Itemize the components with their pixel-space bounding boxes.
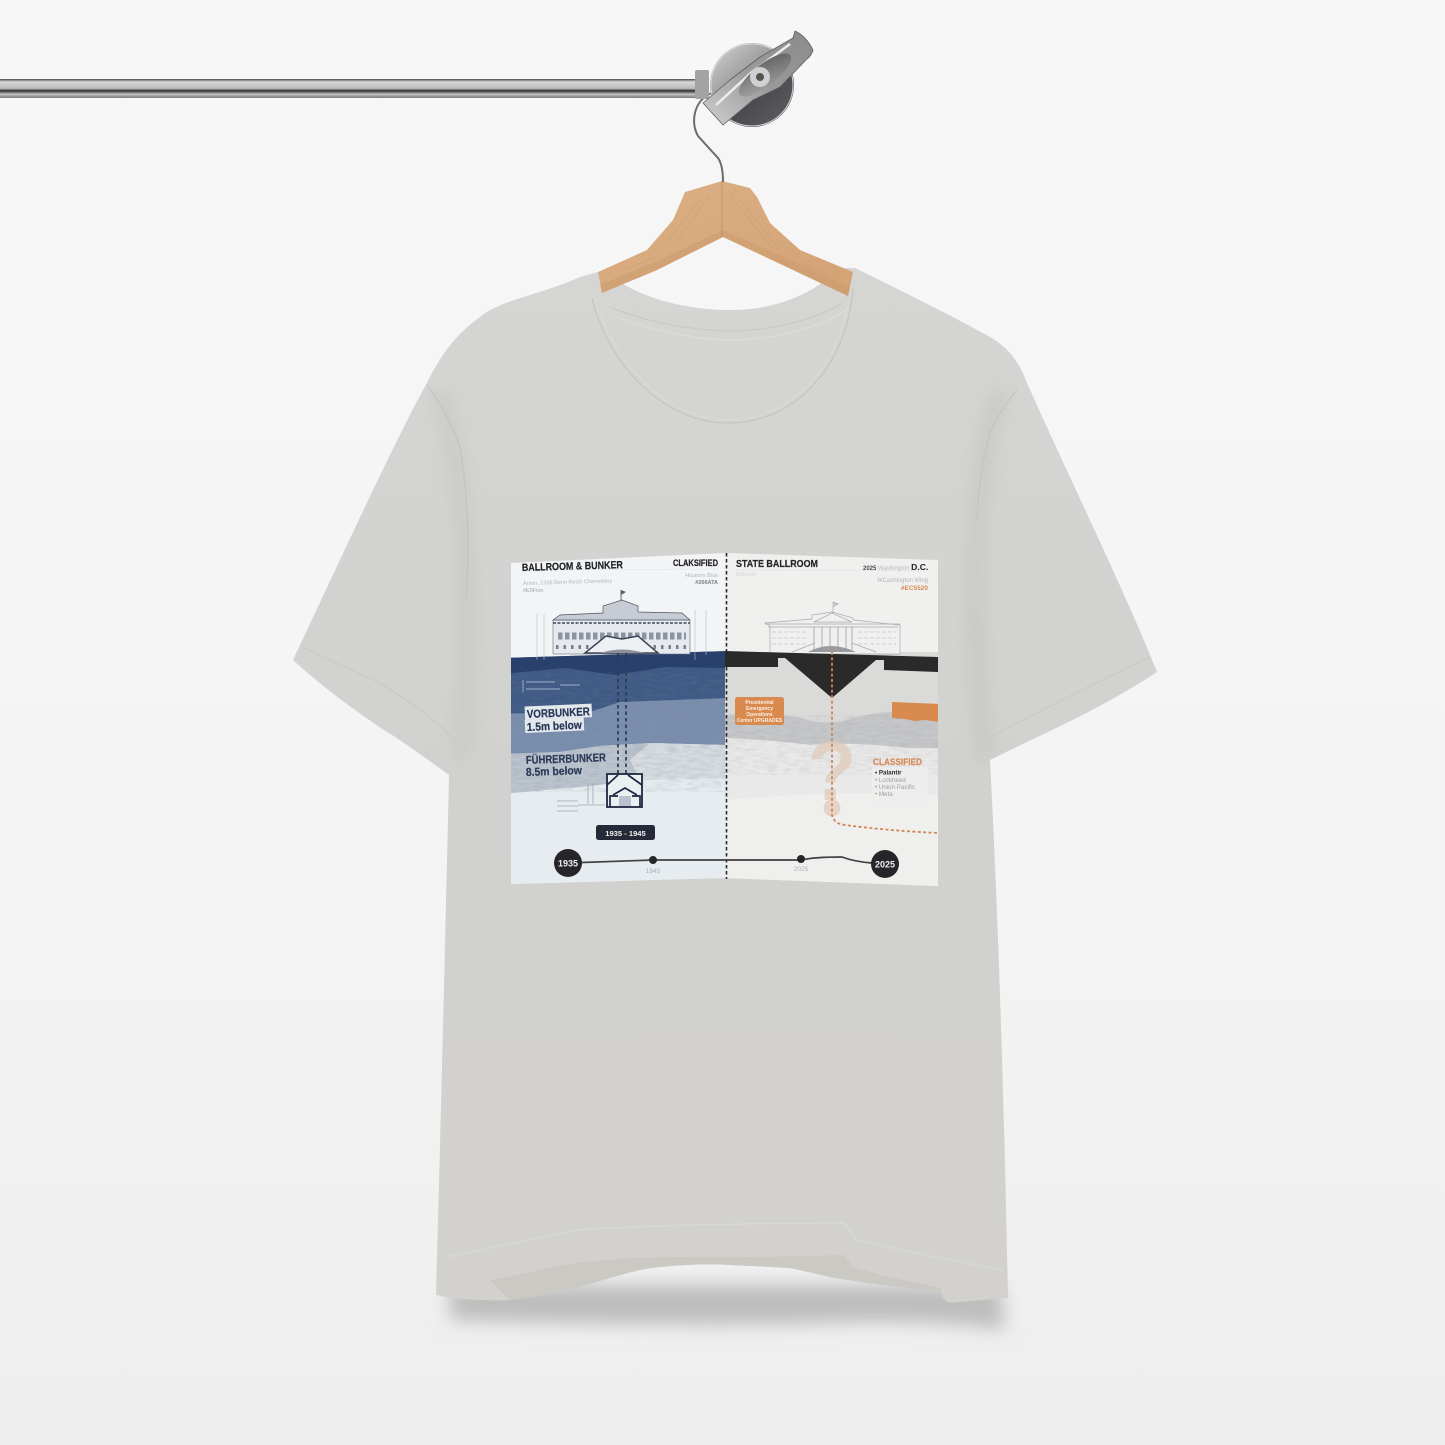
vorbunker label xyxy=(525,704,592,734)
hem underside xyxy=(490,1255,941,1300)
bunker shafts xyxy=(618,653,626,776)
date badge: 1935 - 1945 xyxy=(605,829,647,838)
callout: emergency operations: Operations xyxy=(746,712,773,718)
left header: CLAKSIFIED xyxy=(673,558,718,568)
timeline xyxy=(554,849,899,878)
metal hook xyxy=(694,93,723,182)
stratum: textured rock xyxy=(725,711,945,748)
callout: emergency operations: Center UPGRADES xyxy=(737,718,783,724)
rock texture xyxy=(505,672,727,792)
timeline marker 2025 xyxy=(794,855,809,873)
bunker floor plan xyxy=(557,774,642,811)
question mark xyxy=(811,741,852,816)
vorbunker label: 1.5m below xyxy=(527,720,582,734)
callout: emergency operations: Emergency xyxy=(746,706,773,712)
shirt body xyxy=(293,268,1157,1303)
central dashed divider xyxy=(726,553,728,879)
callout: emergency operations xyxy=(735,697,784,725)
ground shadow under hem xyxy=(450,1285,1005,1330)
callout: classified list: • Union Pacific xyxy=(875,784,915,791)
stratum: mid blue xyxy=(505,698,727,754)
fuhrerbunker label: FÜHRERBUNKER xyxy=(526,751,607,767)
t-shirt xyxy=(293,230,1157,1330)
left paper xyxy=(505,550,727,890)
panel: left 1935 bunker xyxy=(505,550,727,890)
orange torn block xyxy=(892,702,940,722)
callout: classified list: • Lockheed xyxy=(875,777,906,784)
stratum: pale base xyxy=(505,778,727,890)
left header xyxy=(522,558,718,594)
question mark: ? xyxy=(808,725,856,818)
left header: #E5Fion xyxy=(523,588,544,594)
timeline start node 1935 xyxy=(554,849,582,877)
soft fabric folds xyxy=(440,390,1000,760)
timeline marker 1945 xyxy=(646,856,661,875)
timeline start node 1935: 1935 xyxy=(558,858,578,868)
vorbunker label: VORBUNKER xyxy=(527,706,591,721)
right header: STATE BALLROOM xyxy=(736,558,818,570)
timeline marker 2025: 2025 xyxy=(794,866,809,873)
faint survey annotations xyxy=(523,680,580,692)
left header: Hicatom Blue xyxy=(685,573,718,579)
collar ribbing xyxy=(592,288,853,423)
white house elevation xyxy=(765,602,900,654)
timeline marker 1945: 1945 xyxy=(646,868,661,875)
inner neckline opening xyxy=(623,230,822,310)
right paper xyxy=(725,553,938,745)
callout: classified list xyxy=(872,758,928,796)
left header: Arson, 1338 Berin Reish Chernobley xyxy=(523,579,613,587)
stratum: pale base xyxy=(725,738,945,890)
callout: classified list: CLASSIFIED xyxy=(873,757,922,768)
orange dashed line and route xyxy=(832,652,940,833)
timeline end node 2025 xyxy=(871,850,899,878)
right header: Ballroom xyxy=(736,572,756,578)
callout: emergency operations: Presidential xyxy=(745,700,774,706)
black foundation and wedge xyxy=(725,651,938,698)
right header xyxy=(736,560,928,590)
left header: #266ATA xyxy=(695,580,718,586)
stratum: grey under band xyxy=(725,652,938,722)
rock texture xyxy=(725,715,945,775)
left header: BALLROOM & BUNKER xyxy=(522,559,623,574)
right header: WCashington Wing xyxy=(877,577,928,584)
timeline end node 2025: 2025 xyxy=(875,860,895,870)
printed graphic xyxy=(505,550,945,890)
right header: #EC5520 xyxy=(901,585,928,592)
fuhrerbunker label: 8.5m below xyxy=(526,765,582,779)
right header: 2025 Washington D.C. xyxy=(863,562,928,572)
ballroom elevation drawing xyxy=(537,590,706,660)
callout: classified list: • Palantir xyxy=(875,770,902,776)
stratum: navy top xyxy=(505,651,727,714)
stratum: grey xyxy=(511,743,650,794)
pulley clamp xyxy=(695,31,813,127)
callout: classified list: • Meta xyxy=(875,791,893,798)
shirt seams xyxy=(303,385,1150,1270)
panel: right 2025 ballroom xyxy=(725,550,945,890)
fuhrerbunker label xyxy=(526,753,606,776)
hanging rod xyxy=(0,79,698,98)
wooden hanger xyxy=(598,181,853,296)
date badge xyxy=(596,825,655,840)
